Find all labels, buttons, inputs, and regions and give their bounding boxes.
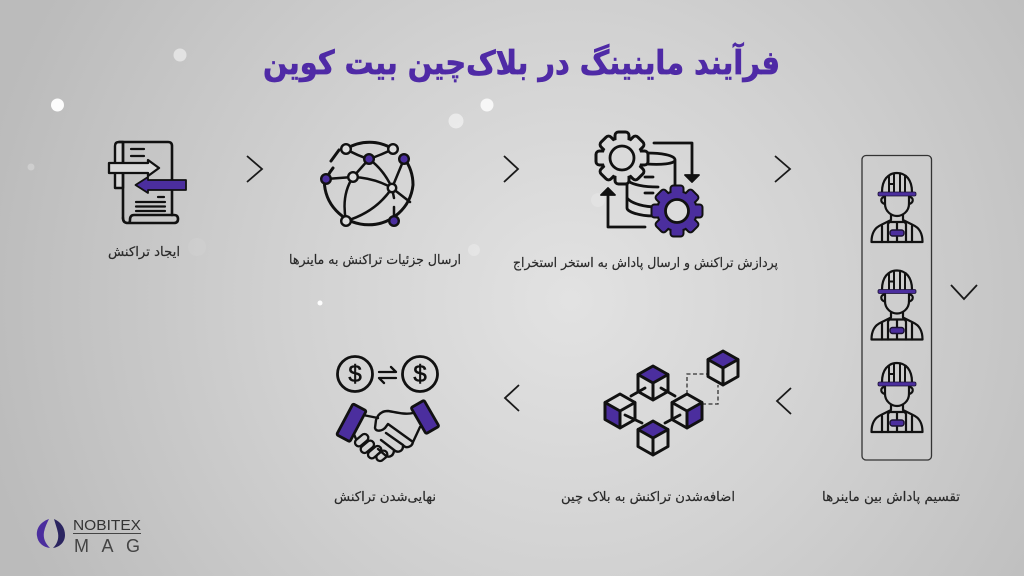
icon: network globe [321,142,413,226]
logo: Nobitex Mag: MAG [74,536,140,556]
arrow: step 1 to step 2 [247,156,262,182]
step 4: miners panel [822,156,960,505]
logo: Nobitex Mag [37,518,141,556]
step 2: send details to miners [289,142,461,268]
panel: miners box [862,156,932,460]
icon: gears and database [598,134,702,236]
icon: handshake with coins: $ [413,361,427,388]
icon: handshake with coins: $ [348,361,362,388]
step 3: processing and reward [513,134,778,271]
arrow: step 4 to step 5 [951,285,977,299]
arrow: step 5 to step 6 [777,388,791,414]
icon: miner 3 [872,363,922,432]
icon: blockchain cubes [605,351,738,455]
label: create transaction: ایجاد تراکنش [108,245,180,260]
label: processing and reward: پردازش تراکنش و ارسال پاداش به استخر استخراج [513,256,778,271]
decorative bokeh dots [28,48,605,306]
title: فرآیند ماینینگ در بلاک‌چین بیت کوین [263,42,780,83]
icon: miner 1 [872,173,922,242]
logo: Nobitex Mag: NOBITEX [73,518,141,534]
step 6: finalized transaction [334,356,439,505]
icon: handshake with coins [337,356,439,463]
step 5: added to blockchain [561,351,738,505]
label: divide reward between miners: تقسیم پاداش بین ماینرها [822,490,960,505]
arrow: step 3 to step 4 [775,156,790,182]
step 1: create transaction [108,142,186,260]
label: added to blockchain: اضافه‌شدن تراکنش به بلاک چین [561,490,735,505]
arrow: step 5 to step 6 second [505,385,519,411]
arrow: step 2 to step 3 [504,156,518,182]
label: send details to miners: ارسال جزئیات تراکنش به ماینرها [289,253,461,268]
icon: document with arrows [109,142,186,223]
icon: miner 2 [872,270,922,340]
label: finalized transaction: نهایی‌شدن تراکنش [334,490,436,505]
